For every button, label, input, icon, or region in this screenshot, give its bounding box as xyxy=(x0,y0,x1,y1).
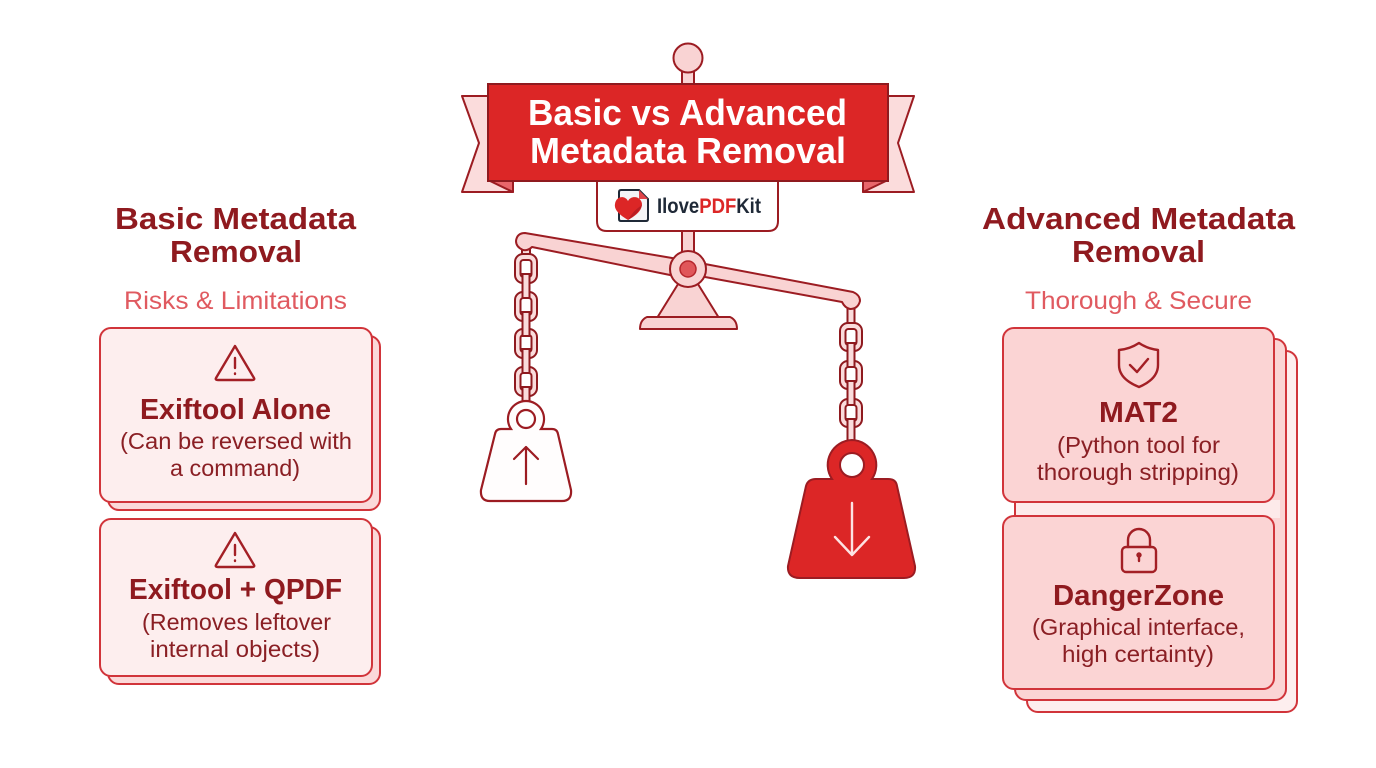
logo plate xyxy=(597,178,778,231)
card text xyxy=(120,428,352,481)
icon: heart on document xyxy=(615,190,648,221)
title xyxy=(528,92,847,171)
left column heading: Removal xyxy=(170,234,302,269)
card title: MAT2 xyxy=(1099,397,1178,429)
title: Metadata Removal xyxy=(530,130,846,171)
card text: (Removes leftover xyxy=(142,609,331,635)
stacked back cards xyxy=(1015,339,1297,712)
card text: (Python tool for xyxy=(1057,432,1220,458)
left column heading xyxy=(115,201,357,269)
panel: Exiftool Alone xyxy=(100,328,380,510)
scale: lower post xyxy=(682,229,694,259)
card text: (Can be reversed with xyxy=(120,428,352,454)
card text: high certainty) xyxy=(1062,641,1214,667)
right chain xyxy=(840,306,862,442)
icon: shield check xyxy=(1119,343,1158,387)
panel: Exiftool + QPDF xyxy=(100,519,380,684)
card text: thorough stripping) xyxy=(1037,459,1239,485)
right column heading: Advanced Metadata xyxy=(982,201,1296,236)
card text xyxy=(142,609,331,662)
title ribbon xyxy=(462,84,914,192)
logo wordmark: IlovePDFKit xyxy=(657,195,761,218)
card text: internal objects) xyxy=(150,636,320,662)
left column heading: Basic Metadata xyxy=(115,201,357,236)
icon: warning xyxy=(216,346,254,380)
right column heading xyxy=(982,201,1296,269)
right column heading: Removal xyxy=(1072,234,1205,269)
icon: padlock xyxy=(1122,529,1156,572)
card title: Exiftool Alone xyxy=(140,394,331,426)
title: Basic vs Advanced xyxy=(528,92,847,133)
right weight: heavy with down arrow xyxy=(788,440,915,578)
card text: (Graphical interface, xyxy=(1032,614,1245,640)
panel: DangerZone xyxy=(1003,516,1274,689)
card text: a command) xyxy=(170,455,300,481)
card title: DangerZone xyxy=(1053,580,1224,612)
scale: base xyxy=(640,268,737,329)
left column subtitle: Risks & Limitations xyxy=(124,287,347,315)
scale: post and top knob xyxy=(674,44,702,86)
right column subtitle: Thorough & Secure xyxy=(1025,287,1252,315)
card text xyxy=(1037,432,1239,485)
left weight: light with up arrow xyxy=(481,401,571,501)
scale: tilted beam and pivot xyxy=(516,233,860,309)
card title: Exiftool + QPDF xyxy=(129,574,342,606)
left chain xyxy=(515,247,537,403)
icon: warning xyxy=(216,533,254,567)
card text xyxy=(1032,614,1245,667)
panel: MAT2 xyxy=(1003,328,1274,502)
